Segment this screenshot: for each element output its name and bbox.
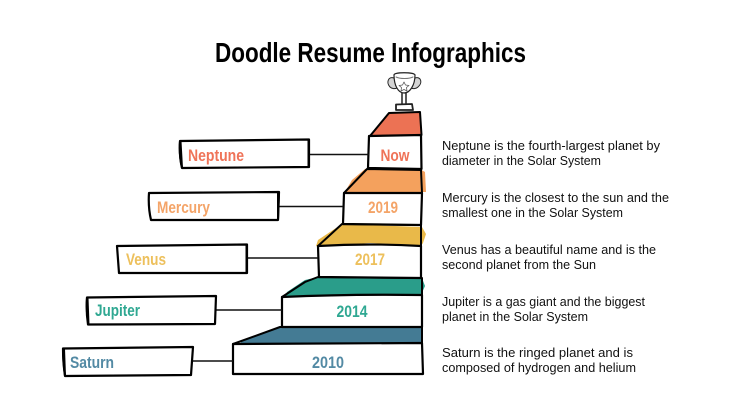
step outline: Mercury — [344, 169, 422, 193]
year: Now: Now — [380, 146, 410, 165]
text: Jupiter description: planet in the Solar System — [442, 310, 588, 324]
step roof: Saturn — [241, 327, 422, 347]
label: Saturn — [62, 347, 193, 376]
step: Jupiter — [282, 277, 425, 327]
step roof: Neptune — [370, 112, 421, 136]
text: Saturn description: composed of hydrogen and helium — [442, 361, 636, 375]
icon: trophy — [388, 73, 421, 110]
label: Saturn: Saturn — [70, 353, 114, 372]
year: 2014: 2014 — [336, 302, 368, 321]
step box: Jupiter — [282, 295, 422, 327]
text: Mercury description: Mercury is the closest to the sun and the — [442, 191, 669, 205]
connector: Jupiter — [216, 309, 282, 311]
step box: Saturn — [233, 343, 423, 374]
text: Mercury description — [442, 191, 669, 220]
label: Mercury — [149, 192, 280, 220]
year: 2019: 2019 — [368, 198, 398, 217]
step roof: Mercury — [344, 169, 426, 193]
text: Venus description: second planet from the Sun — [442, 258, 596, 272]
label: Neptune: Neptune — [188, 146, 244, 165]
step roof: Jupiter — [284, 277, 425, 298]
step outline: Saturn — [233, 327, 422, 344]
title: Doodle Resume Infographics — [215, 37, 526, 68]
text: Venus description — [442, 243, 656, 272]
connector: Venus — [247, 257, 318, 259]
step outline: Jupiter — [282, 277, 422, 297]
label: Neptune — [179, 139, 310, 168]
text: Venus description: Venus has a beautiful name and is the — [442, 243, 656, 257]
year: 2010: 2010 — [312, 353, 344, 372]
step: Neptune — [368, 112, 422, 169]
text: Saturn description — [442, 346, 636, 375]
year: 2017: 2017 — [355, 250, 385, 269]
label: Jupiter: Jupiter — [95, 301, 140, 320]
connector: Saturn — [193, 360, 233, 362]
step box: Neptune — [368, 135, 422, 169]
text: Neptune description: Neptune is the fourth-largest planet by — [442, 139, 661, 153]
text: Mercury description: smallest one in the Solar System — [442, 206, 623, 220]
label: Venus: Venus — [126, 250, 166, 269]
step: Saturn — [233, 327, 423, 374]
step roof: Venus — [316, 224, 426, 247]
connector: Mercury — [279, 206, 343, 208]
step: Venus — [316, 224, 426, 278]
text: Neptune description: diameter in the Solar System — [442, 154, 601, 168]
text: Jupiter description — [442, 295, 646, 324]
text: Neptune description — [442, 139, 661, 168]
step outline: Venus — [318, 224, 421, 246]
step: Mercury — [343, 169, 426, 225]
text: Saturn description: Saturn is the ringed planet and is — [442, 346, 633, 360]
step box: Venus — [318, 244, 421, 278]
text: Jupiter description: Jupiter is a gas giant and the biggest — [442, 295, 646, 309]
label: Jupiter — [86, 296, 216, 324]
step box: Mercury — [343, 193, 422, 225]
step outline: Neptune — [370, 112, 422, 136]
connector: Neptune — [309, 154, 369, 156]
label: Mercury: Mercury — [157, 198, 210, 217]
label: Venus — [117, 244, 248, 273]
